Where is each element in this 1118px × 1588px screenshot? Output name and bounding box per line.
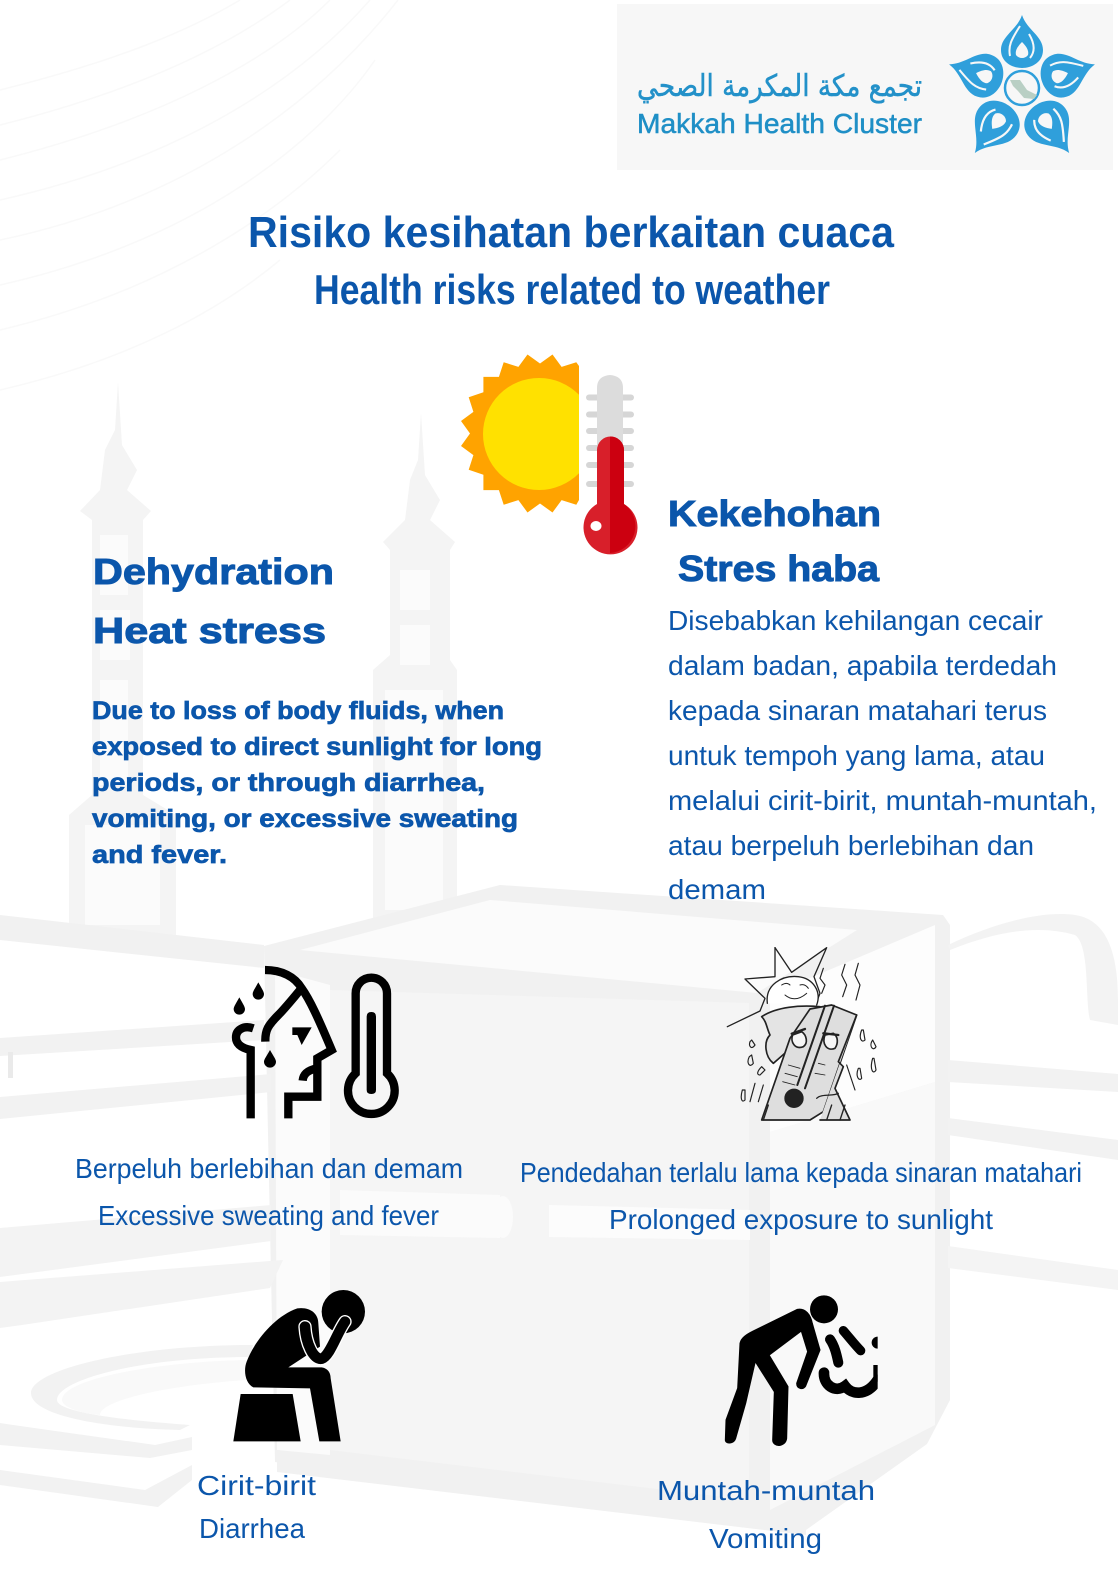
title line: Malay: Risiko kesihatan berkaitan cuaca (248, 208, 894, 257)
icon: person holding head (233, 1290, 365, 1441)
text block: Malay dehydration (668, 493, 1097, 905)
logo arabic name: تجمع مكة المكرمة الصحي (637, 69, 922, 104)
text block: English dehydration (92, 551, 542, 869)
caption: vomiting (657, 1475, 875, 1554)
paragraph: English description: and fever. (92, 841, 227, 869)
paragraph: English description: Due to loss of body fluids, when (92, 697, 504, 725)
caption: diarrhea (197, 1470, 316, 1544)
heading: Kekehohan: Kekehohan (668, 493, 881, 534)
caption: diarrhea: Diarrhea (199, 1513, 305, 1544)
logo english name: Makkah Health Cluster (637, 108, 922, 139)
paragraph: Malay description: untuk tempoh yang lama, atau (668, 740, 1045, 771)
paragraph: English description: periods, or through diarrhea, (92, 769, 485, 797)
caption: diarrhea: Cirit-birit (197, 1470, 316, 1501)
heading: Heat stress: Heat stress (93, 610, 326, 651)
paragraph: English description (92, 697, 542, 869)
caption: sweating and fever: Excessive sweating and fever (98, 1200, 439, 1231)
caption: prolonged sun exposure (520, 1157, 1082, 1235)
paragraph: English description: vomiting, or excessive sweating (92, 805, 518, 833)
caption: vomiting: Muntah-muntah (657, 1475, 875, 1506)
caption: vomiting: Vomiting (709, 1523, 822, 1554)
logo star emblem (942, 15, 1102, 167)
paragraph: Malay description: kepada sinaran matahari terus (668, 695, 1047, 726)
icon: person vomiting (726, 1295, 884, 1445)
paragraph: Malay description (668, 605, 1097, 905)
caption: prolonged sun exposure: Prolonged exposure to sunlight (609, 1204, 993, 1235)
caption: sweating and fever: Berpeluh berlebihan dan demam (75, 1153, 463, 1184)
paragraph: Malay description: melalui cirit-birit, muntah-muntah, (668, 785, 1097, 816)
paragraph: Malay description: atau berpeluh berlebihan dan (668, 830, 1034, 861)
paragraph: Malay description: Disebabkan kehilangan cecair (668, 605, 1043, 636)
title line: English: Health risks related to weather (314, 266, 830, 313)
heading: Dehydration: Dehydration (93, 551, 334, 592)
icon: sun and thermometer (461, 354, 638, 554)
paragraph: Malay description: dalam badan, apabila terdedah (668, 650, 1057, 681)
caption: sweating and fever (75, 1153, 463, 1231)
icon: sweating face with thermometer (234, 970, 395, 1118)
title (248, 208, 894, 313)
heading: Stres haba: Stres haba (678, 548, 880, 589)
paragraph: English description: exposed to direct sunlight for long (92, 733, 542, 761)
logo panel: Makkah Health Cluster (617, 4, 1113, 170)
paragraph: Malay description: demam (668, 874, 766, 905)
icon: sweating thermometer cartoon (727, 948, 876, 1120)
